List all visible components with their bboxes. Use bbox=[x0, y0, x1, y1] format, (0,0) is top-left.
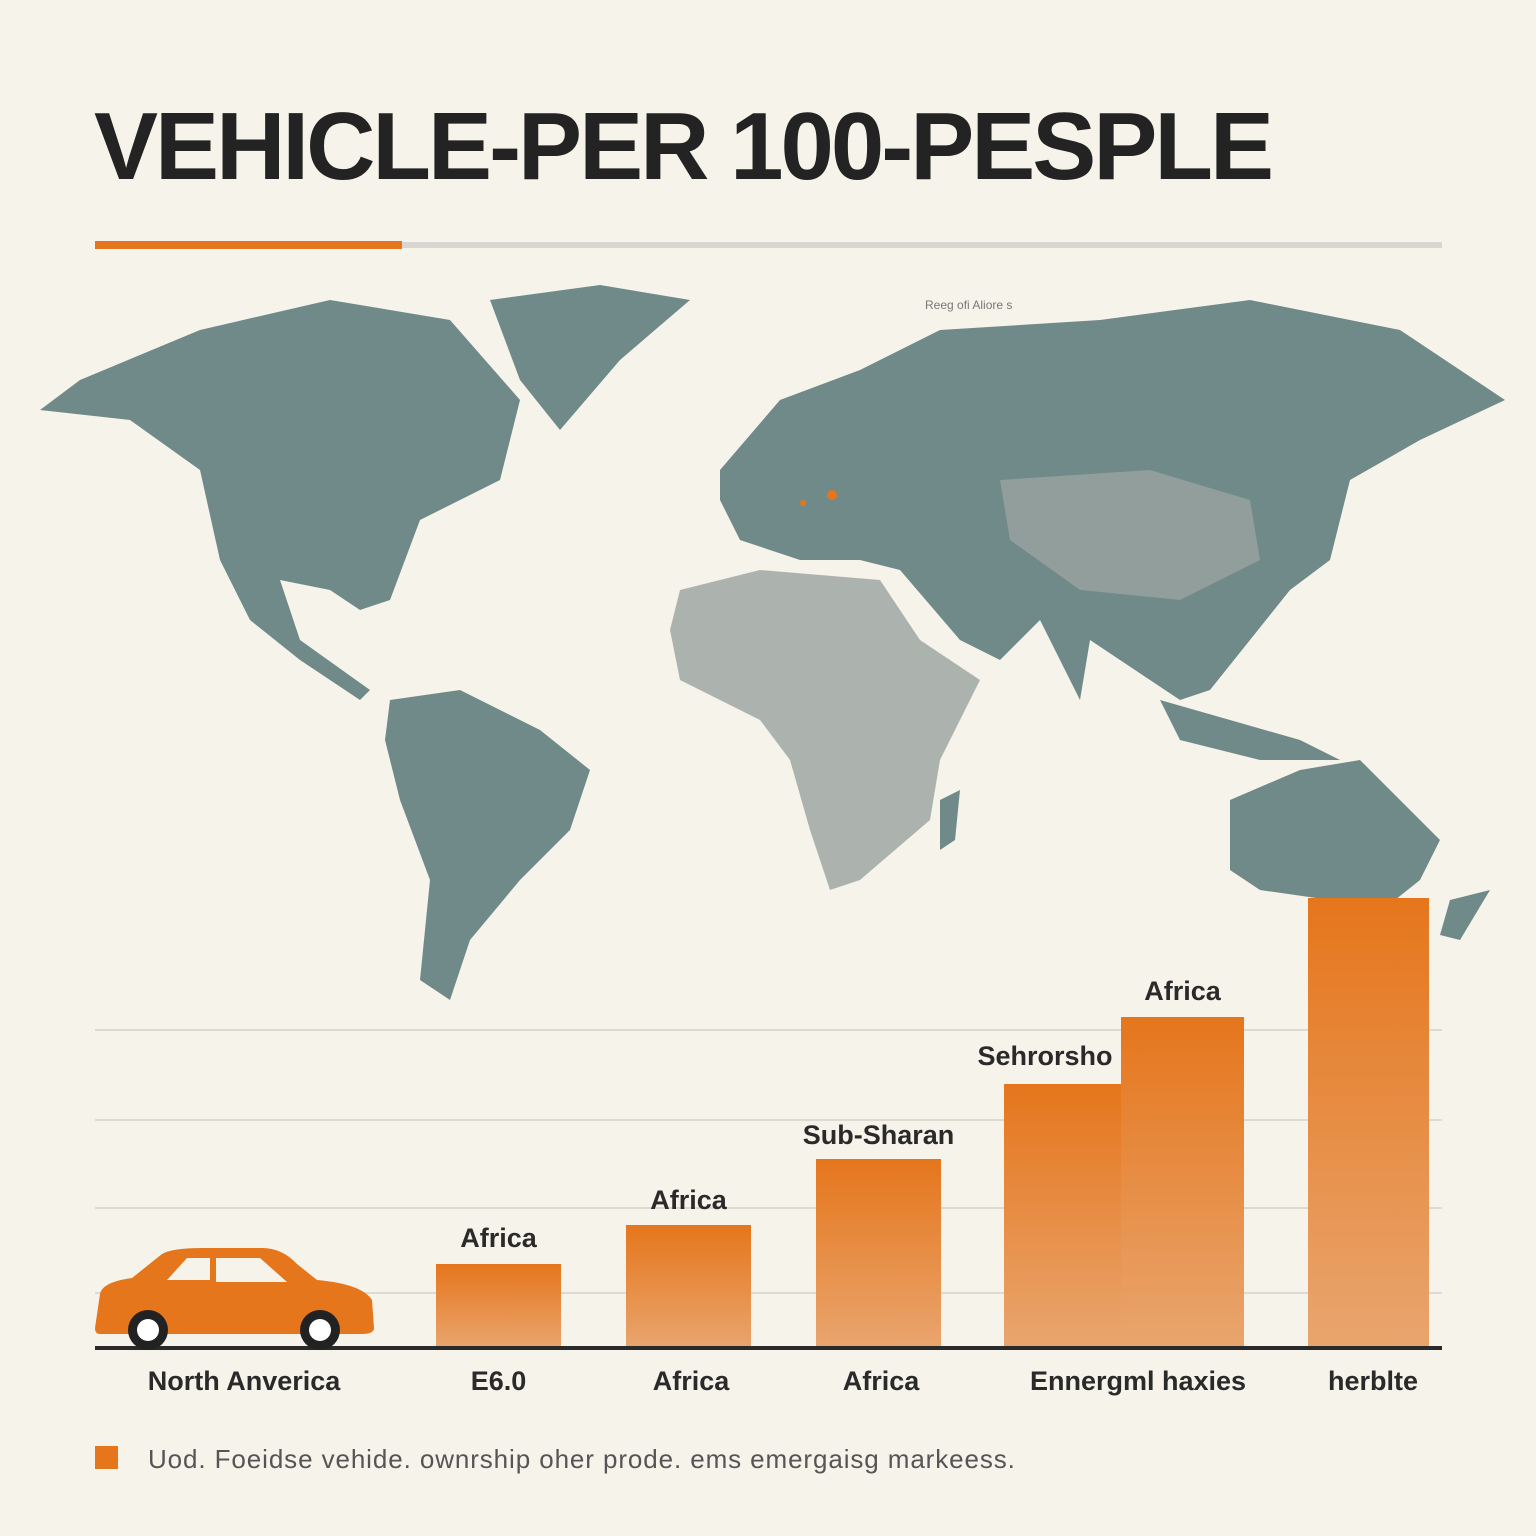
x-axis labels: Africa bbox=[653, 1366, 729, 1396]
bar chart: Africa bbox=[460, 1223, 537, 1253]
title underline bbox=[95, 241, 1442, 249]
map note: Reeg ofi Aliore s bbox=[925, 298, 1012, 312]
bar chart: Africa bbox=[650, 1185, 727, 1215]
bar chart bbox=[100, 898, 1429, 1346]
x-axis labels: Africa bbox=[843, 1366, 919, 1396]
bar chart: Africa bbox=[1144, 976, 1221, 1006]
bar 1 bbox=[436, 1264, 561, 1348]
bar 3 bbox=[816, 1159, 941, 1348]
x-axis labels bbox=[148, 1366, 1418, 1396]
legend: Uod. Foeidse vehide. ownrship oher prode. ems emergaisg markeess. bbox=[148, 1444, 1016, 1474]
baseline bbox=[95, 1346, 1442, 1350]
gridlines bbox=[95, 1029, 1442, 1031]
bar 4 bbox=[1004, 1084, 1121, 1348]
world map bbox=[40, 285, 1505, 1000]
icon: car bbox=[95, 1248, 374, 1350]
bar 6 bbox=[1308, 898, 1429, 1348]
title: VEHICLE-PER 100-PESPLE bbox=[94, 93, 1271, 200]
bar 2 bbox=[626, 1225, 751, 1348]
bar chart: Sub-Sharan bbox=[803, 1120, 954, 1150]
x-axis labels: North Anverica bbox=[148, 1366, 340, 1396]
x-axis labels: Ennergml haxies bbox=[1030, 1366, 1246, 1396]
bar chart: Sehrorsho bbox=[977, 1041, 1113, 1071]
x-axis labels: E6.0 bbox=[471, 1366, 526, 1396]
bar 5 bbox=[1121, 1017, 1244, 1348]
x-axis labels: herblte bbox=[1328, 1366, 1418, 1396]
